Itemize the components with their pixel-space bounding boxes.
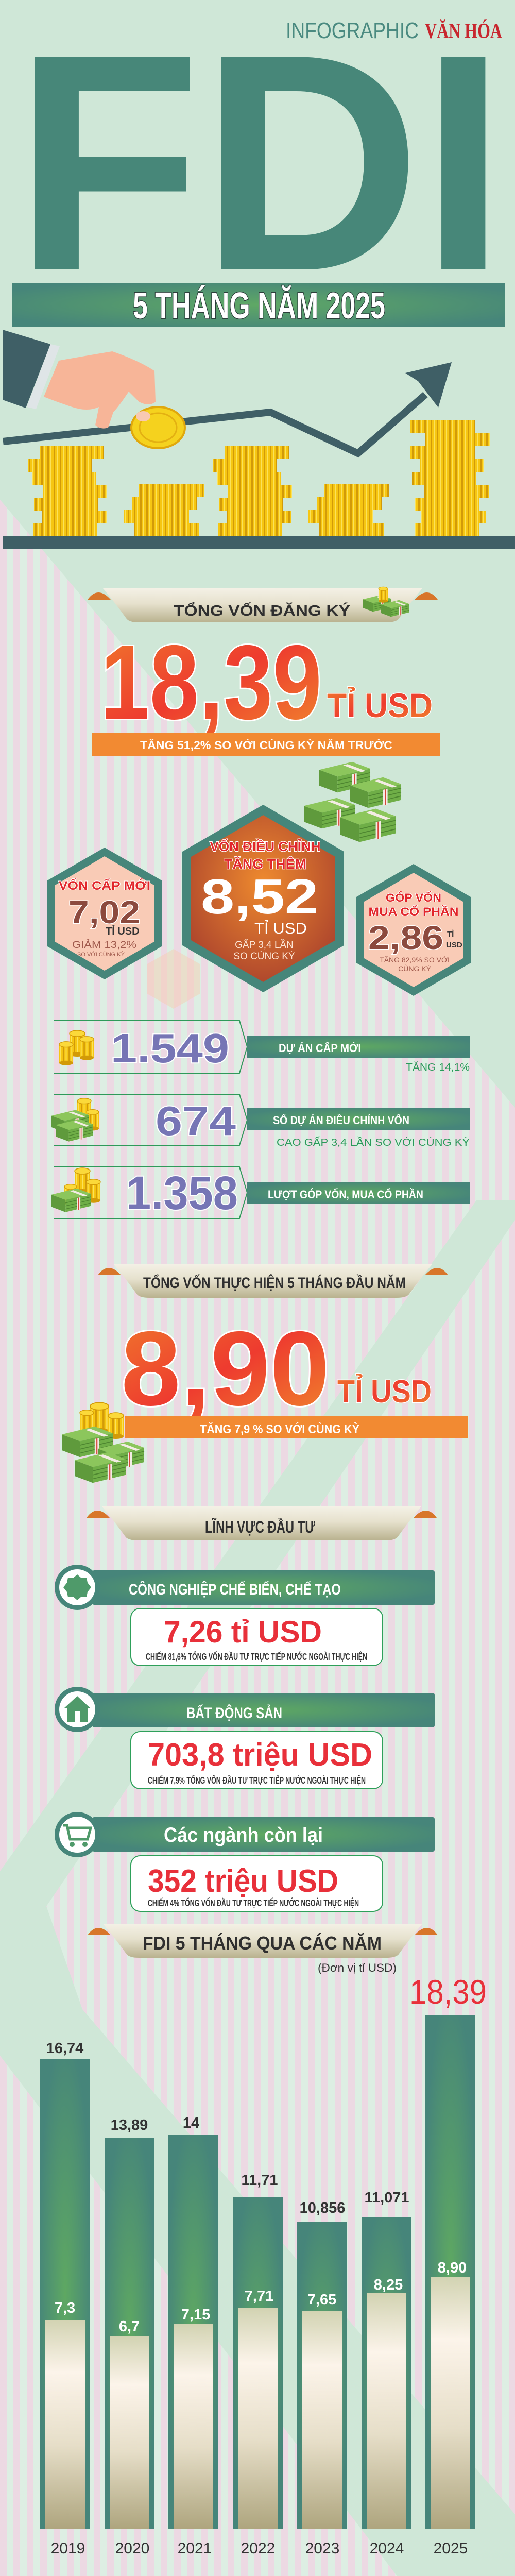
icon: money and coins: [62, 1402, 144, 1483]
stat row: 1.358 lượt góp vốn: LƯỢT GÓP VỐN, MUA CỔ PHẦN: [268, 1188, 423, 1201]
hexagon: góp vốn mua cổ phần: CÙNG KỲ: [398, 964, 432, 973]
sector: công nghiệp chế biến, chế tạo: [55, 1565, 435, 1666]
hexagon: vốn cấp mới: 7,02: [68, 895, 140, 930]
stat row: 674 dự án điều chỉnh vốn: SỐ DỰ ÁN ĐIỀU CHỈNH VỐN: [273, 1113, 409, 1127]
subtitle banner: 5 THÁNG NĂM 2025: [12, 283, 505, 327]
hexagon: vốn điều chỉnh tăng thêm: GẤP 3,4 LẦN: [235, 939, 294, 951]
big number: 8,90 tỉ USD: [121, 1310, 432, 1428]
sector: công nghiệp chế biến, chế tạo: CHIẾM 81,6% TỔNG VỐN ĐẦU TƯ TRỰC TIẾP NƯỚC NGOÀI THỰC HIỆN: [146, 1651, 367, 1662]
hexagon: vốn điều chỉnh tăng thêm: [182, 805, 344, 992]
bar chart: FDI by year: 10,856: [300, 2200, 345, 2216]
big number: 8,90 tỉ USD: 8,90: [121, 1310, 330, 1428]
orange bar: growth 51,2%: [92, 733, 440, 756]
stat row: 674 dự án điều chỉnh vốn: CAO GẤP 3,4 LẦN SO VỚI CÙNG KỲ: [277, 1137, 470, 1148]
bar chart: FDI by year: 7,15: [181, 2307, 210, 2323]
subtitle banner: 5 THÁNG NĂM 2025: 5 THÁNG NĂM 2025: [133, 285, 385, 327]
sector: các ngành còn lại: [55, 1812, 435, 1911]
bar chart: FDI by year: 2025: [434, 2540, 468, 2557]
ribbon heading: lĩnh vực đầu tư: LĨNH VỰC ĐẦU TƯ: [205, 1518, 315, 1536]
hexagon: góp vốn mua cổ phần: MUA CỔ PHẦN: [369, 905, 458, 918]
orange bar: growth 51,2%: TĂNG 51,2% SO VỚI CÙNG KỲ NĂM TRƯỚC: [140, 739, 392, 752]
bar chart: FDI by year: 2019: [51, 2540, 85, 2557]
stat row: 1.358 lượt góp vốn: 1.358: [126, 1167, 238, 1219]
sector: các ngành còn lại: Các ngành còn lại: [164, 1824, 323, 1846]
ribbon heading: tổng vốn thực hiện: TỔNG VỐN THỰC HIỆN 5 THÁNG ĐẦU NĂM: [143, 1274, 406, 1292]
illustration: hand, growth arrow, coin stacks: [3, 330, 515, 549]
bar chart: FDI by year: 2021: [178, 2540, 212, 2557]
stat row: 674 dự án điều chỉnh vốn: 674: [156, 1098, 236, 1144]
bar chart: FDI by year: 13,89: [111, 2117, 148, 2133]
bar chart: FDI by year: 2020: [115, 2540, 149, 2557]
big number: 18,39 tỉ USD: TỈ USD: [327, 686, 433, 724]
sector: các ngành còn lại: 352 triệu USD: [148, 1863, 338, 1899]
hexagon: vốn điều chỉnh tăng thêm: TỈ USD: [254, 920, 307, 937]
hexagon: vốn cấp mới: [47, 848, 162, 979]
bar chart: FDI by year: 7,65: [307, 2292, 336, 2308]
bar chart: FDI by year: 8,25: [374, 2277, 403, 2293]
title: FDI: FDI: [14, 0, 506, 335]
sector: công nghiệp chế biến, chế tạo: CÔNG NGHIỆP CHẾ BIẾN, CHẾ TẠO: [129, 1581, 341, 1598]
icon: money stacks: [304, 762, 401, 842]
hexagon: vốn điều chỉnh tăng thêm: VỐN ĐIỀU CHỈNH: [210, 839, 320, 854]
sector: bất động sản: CHIẾM 7,9% TỔNG VỐN ĐẦU TƯ TRỰC TIẾP NƯỚC NGOÀI THỰC HIỆN: [148, 1775, 366, 1786]
bar chart: FDI by year: 8,90: [438, 2260, 467, 2276]
hexagon: góp vốn mua cổ phần: 2,86: [368, 919, 443, 956]
bar chart: FDI by year: 14: [183, 2115, 199, 2131]
bar chart: FDI by year: 7,3: [55, 2300, 75, 2316]
bar chart: FDI by year: [40, 1973, 487, 2557]
hexagon: góp vốn mua cổ phần: GÓP VỐN: [386, 891, 441, 904]
stat row: 1.549 dự án cấp mới: DỰ ÁN CẤP MỚI: [279, 1042, 361, 1055]
bar chart: FDI by year: 16,74: [46, 2040, 83, 2057]
bar chart: FDI by year: 2023: [305, 2540, 339, 2557]
hexagon: vốn cấp mới: GIẢM 13,2%: [72, 939, 136, 951]
sector: công nghiệp chế biến, chế tạo: 7,26 tỉ USD: [164, 1615, 322, 1649]
sector: bất động sản: [55, 1687, 435, 1789]
sector: các ngành còn lại: CHIẾM 4% TỔNG VỐN ĐẦU TƯ TRỰC TIẾP NƯỚC NGOÀI THỰC HIỆN: [148, 1897, 359, 1908]
orange bar: growth 7,9%: TĂNG 7,9 % SO VỚI CÙNG KỲ: [200, 1422, 359, 1436]
decorative faded hexagon: [147, 949, 200, 1009]
hexagon: góp vốn mua cổ phần: USD: [446, 941, 462, 950]
orange bar: growth 7,9%: [125, 1416, 468, 1438]
big number: 18,39 tỉ USD: 18,39: [100, 623, 322, 741]
sector: bất động sản: BẤT ĐỘNG SẢN: [186, 1704, 282, 1722]
hexagon: góp vốn mua cổ phần: TỈ: [447, 930, 454, 939]
hexagon: vốn cấp mới: SO VỚI CÙNG KỲ: [77, 951, 125, 958]
bar chart: FDI by year: 18,39: [409, 1973, 487, 2011]
hexagon: vốn điều chỉnh tăng thêm: TĂNG THÊM: [224, 856, 306, 872]
hexagon: vốn điều chỉnh tăng thêm: SO CÙNG KỲ: [233, 951, 295, 962]
chart unit note: (Đơn vị tỉ USD): [318, 1961, 397, 1974]
stat row: 674 dự án điều chỉnh vốn: [52, 1094, 470, 1148]
header brand: INFOGRAPHIC: [286, 18, 419, 43]
hexagon: vốn cấp mới: VỐN CẤP MỚI: [59, 878, 150, 893]
bar chart: FDI by year: 7,71: [245, 2288, 273, 2304]
ribbon heading: TỔNG VỐN ĐĂNG KÝ: TỔNG VỐN ĐĂNG KÝ: [174, 602, 350, 619]
ribbon heading: tổng vốn thực hiện: [98, 1264, 448, 1298]
bar chart: FDI by year: 6,7: [119, 2318, 140, 2335]
hexagon: vốn điều chỉnh tăng thêm: 8,52: [201, 869, 318, 924]
sector: bất động sản: 703,8 triệu USD: [148, 1737, 372, 1773]
ribbon heading: FDI 5 tháng qua các năm: FDI 5 THÁNG QUA CÁC NĂM: [143, 1933, 382, 1954]
bar chart: FDI by year: 2024: [370, 2540, 404, 2557]
ribbon heading: lĩnh vực đầu tư: [87, 1506, 437, 1540]
hexagon: vốn cấp mới: TỈ USD: [106, 925, 140, 937]
hexagon: góp vốn mua cổ phần: [356, 864, 471, 996]
stat row: 1.549 dự án cấp mới: [54, 1021, 470, 1073]
bar chart: FDI by year: 11,71: [242, 2172, 278, 2189]
stat row: 1.549 dự án cấp mới: TĂNG 14,1%: [406, 1061, 470, 1073]
bar chart: FDI by year: 2022: [241, 2540, 275, 2557]
stat row: 1.358 lượt góp vốn: [52, 1167, 470, 1219]
bar chart: FDI by year: 11,071: [364, 2190, 409, 2206]
stat row: 1.549 dự án cấp mới: 1.549: [111, 1025, 229, 1071]
hexagon: góp vốn mua cổ phần: TĂNG 82,9% SO VỚI: [380, 956, 450, 964]
ribbon heading: FDI 5 tháng qua các năm: [88, 1924, 438, 1958]
ribbon heading: TỔNG VỐN ĐĂNG KÝ: [88, 587, 438, 622]
big number: 8,90 tỉ USD: TỈ USD: [337, 1374, 432, 1410]
